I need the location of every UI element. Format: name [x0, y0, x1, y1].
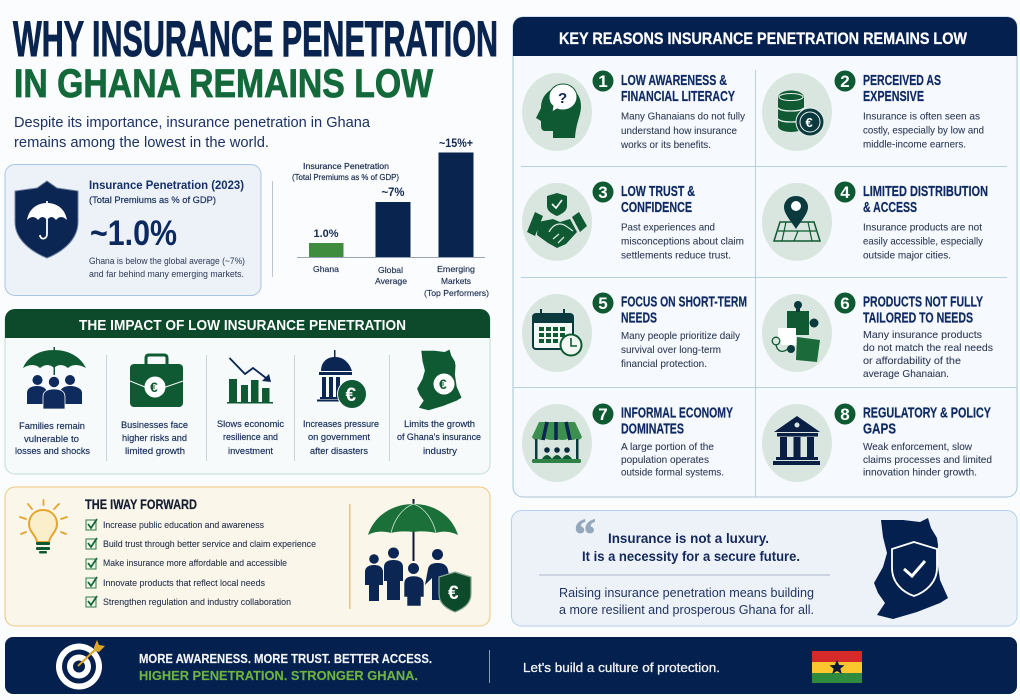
impact: industry — [397, 350, 481, 457]
reason 4: Insurance products are not — [863, 222, 982, 234]
impact: businesses: higher risks and — [122, 433, 187, 444]
reason 8: 8 — [840, 405, 850, 424]
reason 6: or affordability of the — [863, 356, 961, 367]
reason 2: PERCEIVED AS — [863, 73, 941, 89]
impact: businesses: Businesses face — [121, 420, 188, 431]
reason 2: EXPENSIVE — [863, 89, 924, 105]
stat note: and far behind many emerging markets. — [89, 269, 244, 279]
quote subtext — [559, 586, 814, 617]
bar: Emerging Markets — [424, 138, 489, 298]
stat value: ~1.0% — [90, 214, 177, 253]
reason 3 — [522, 182, 744, 262]
impact: businesses — [121, 355, 188, 457]
icon: light bulb — [20, 500, 67, 554]
reason 3: misconceptions about claim — [621, 236, 744, 248]
impact: industry: industry — [423, 446, 457, 457]
reason 8 — [762, 404, 992, 482]
reason 6: Many insurance products — [863, 330, 982, 341]
reason 7: INFORMAL ECONOMY — [621, 406, 733, 422]
panel: penetration stat — [5, 164, 261, 296]
bar: Emerging Markets: Markets — [441, 276, 471, 286]
icon: Ghana flag — [812, 651, 862, 683]
intro text: Despite its importance, insurance penetration in Ghana — [14, 114, 371, 131]
icon: calendar and clock — [533, 309, 582, 356]
panel: penetration stat: (Total Premiums as % of GDP) — [89, 195, 216, 206]
reason 4: 4 — [840, 183, 850, 202]
icon: map pin — [774, 196, 820, 241]
reason 8: innovation hinder growth. — [863, 468, 977, 478]
quote mark: “ — [574, 510, 596, 559]
reason 5 — [522, 292, 747, 372]
reason 5: FOCUS ON SHORT-TERM — [621, 294, 747, 310]
bar: Emerging Markets: (Top Performers) — [424, 288, 489, 298]
impact: families: Families remain — [19, 421, 85, 432]
icon: Ghana map with shield — [874, 518, 948, 619]
quote subtext: Raising insurance penetration means building — [559, 586, 814, 600]
checklist: Increase public education and awareness — [103, 520, 264, 531]
footer slogan: MORE AWARENESS. MORE TRUST. BETTER ACCESS. — [139, 651, 432, 666]
way forward heading: THE IWAY FORWARD — [85, 497, 197, 512]
chart title: (Total Premiums as % of GDP) — [292, 172, 399, 182]
reason 7: DOMINATES — [621, 422, 684, 438]
reason 7: A large portion of the — [621, 442, 714, 453]
reason 2: 2 — [840, 72, 850, 91]
icon: handshake and shield — [527, 193, 587, 248]
chart title — [292, 161, 399, 182]
reason 1: 1 — [598, 72, 608, 91]
reason 6: do not match the real needs — [863, 343, 993, 354]
footer banner — [5, 637, 1017, 694]
impact: government: on government — [308, 432, 370, 443]
quote text: Insurance is not a luxury. — [608, 530, 769, 546]
quote text — [582, 530, 800, 564]
icon: coins stack — [778, 90, 824, 136]
impact: government: € — [346, 385, 356, 406]
icon: family under umbrella — [365, 499, 471, 612]
panel: key reasons — [513, 17, 1017, 497]
reason 5: Many people prioritize daily — [621, 331, 741, 342]
bar: Emerging Markets: Emerging — [437, 264, 475, 274]
checklist — [86, 519, 316, 608]
chart title: Insurance Penetration — [303, 161, 389, 171]
panel: quote — [512, 510, 1017, 626]
reason 6: 6 — [840, 294, 850, 313]
reason 3: LOW TRUST & — [621, 184, 695, 200]
impact: government — [303, 350, 379, 457]
checklist: Innovate products that reflect local needs — [103, 578, 265, 589]
bar chart — [292, 138, 489, 298]
impact: economy: resilience and — [223, 432, 278, 443]
reason 7: population operates — [621, 455, 709, 466]
icon: coins stack: € — [806, 115, 813, 130]
intro text — [14, 114, 371, 151]
icon: head with question: ? — [558, 90, 567, 107]
impact: economy: Slows economic — [217, 419, 284, 430]
reason 6: TAILORED TO NEEDS — [863, 310, 973, 326]
bar: Ghana — [309, 228, 344, 274]
reason 2: Insurance is often seen as — [863, 112, 980, 122]
reason 4: easily accessible, especially — [863, 236, 984, 248]
reason 5: NEEDS — [621, 310, 657, 326]
impact: industry: € — [439, 376, 447, 392]
impact: economy: investment — [228, 446, 273, 457]
reason 6 — [762, 292, 993, 380]
impact: families — [15, 347, 90, 457]
impact: government: Increases pressure — [303, 419, 379, 430]
reason 3: settlements reduce trust. — [621, 250, 731, 262]
checklist: Strengthen regulation and industry collaboration — [103, 597, 291, 608]
reason 1: Many Ghanaians do not fully — [621, 112, 746, 122]
icon: target with dart — [56, 640, 105, 690]
reason 2 — [762, 70, 984, 151]
title: WHY INSURANCE PENETRATION — [13, 11, 498, 67]
panel: impact — [5, 309, 490, 474]
reason 5: financial protection. — [621, 359, 707, 370]
impact: families: vulnerable to — [24, 434, 79, 445]
reason 7: 7 — [598, 405, 608, 424]
bar: Global Average: ~7% — [382, 185, 405, 199]
icon: puzzle pieces — [772, 301, 820, 362]
quote text: It is a necessity for a secure future. — [582, 548, 800, 564]
bar: Ghana: 1.0% — [314, 228, 339, 240]
footer slogan: HIGHER PENETRATION. STRONGER GHANA. — [139, 668, 418, 683]
icon: head with question — [536, 84, 581, 138]
reason 4: outside major cities. — [863, 250, 951, 262]
reason 3: Past experiences and — [621, 222, 715, 234]
impact: industry: Limits the growth — [404, 419, 475, 430]
bar: Global Average: Global — [378, 265, 403, 275]
icon: family under umbrella: € — [448, 583, 459, 604]
impact: businesses: limited growth — [125, 446, 185, 457]
reason 5: 5 — [598, 294, 608, 313]
impact: industry: of Ghana's insurance — [397, 432, 481, 443]
impact: families: losses and shocks — [15, 446, 90, 457]
reason 3: 3 — [598, 183, 608, 202]
reason 1: works or its benefits. — [620, 140, 711, 151]
reason 8: Weak enforcement, slow — [863, 442, 973, 453]
impact heading: THE IMPACT OF LOW INSURANCE PENETRATION — [79, 318, 406, 334]
reason 4: & ACCESS — [863, 200, 917, 216]
reason 1 — [522, 70, 746, 151]
footer call to action: Let's build a culture of protection. — [523, 661, 720, 675]
bar: Global Average: Average — [375, 276, 407, 286]
impact: economy — [217, 358, 284, 457]
stat heading: Insurance Penetration (2023) — [89, 180, 244, 192]
reason 8: GAPS — [863, 422, 896, 438]
impact: government: after disasters — [310, 446, 368, 457]
reason 7 — [522, 404, 733, 482]
reason 5: survival over long-term — [621, 345, 721, 356]
impact: businesses: € — [150, 379, 158, 395]
icon: market stall — [532, 422, 582, 463]
panel: the way forward — [5, 487, 490, 626]
reason 3: CONFIDENCE — [621, 200, 692, 216]
bar: Ghana: Ghana — [313, 264, 339, 274]
footer slogan — [139, 651, 432, 683]
reason 4 — [762, 182, 988, 262]
title — [13, 11, 498, 106]
checklist: Make insurance more affordable and accessible — [103, 558, 287, 569]
quote subtext: a more resilient and prosperous Ghana for all. — [559, 603, 814, 617]
reason 1: LOW AWARENESS & — [621, 73, 727, 89]
stat note — [89, 256, 245, 279]
reason 7: outside formal systems. — [621, 468, 724, 478]
bar: Global Average — [375, 185, 410, 286]
reason 2: middle-income earners. — [863, 140, 966, 150]
icon: bank building — [773, 416, 820, 465]
stat note: Ghana is below the global average (~7%) — [89, 256, 245, 266]
reason 6: average Ghanaian. — [863, 369, 949, 380]
reason 1: understand how insurance — [621, 126, 737, 137]
intro text: remains among the lowest in the world. — [14, 134, 269, 151]
reason 8: claims processes and limited — [863, 455, 992, 466]
title: IN GHANA REMAINS LOW — [14, 62, 433, 106]
reason 1: FINANCIAL LITERACY — [621, 89, 735, 105]
icon: shield with umbrella — [15, 181, 78, 258]
checklist: Build trust through better service and claim experience — [103, 539, 316, 550]
reason 2: costly, especially by low and — [863, 126, 984, 136]
bar: Emerging Markets: ~15%+ — [439, 138, 473, 150]
